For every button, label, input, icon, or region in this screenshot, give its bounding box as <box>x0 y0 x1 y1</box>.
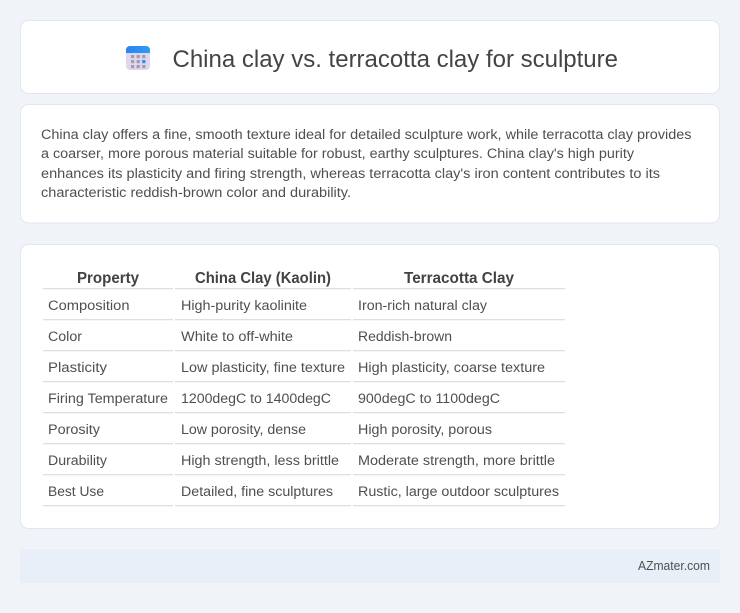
row: plasticity <box>48 360 545 376</box>
row: best use: Detailed, fine sculptures <box>181 484 333 500</box>
icon: calendar <box>126 46 150 70</box>
row: durability: Moderate strength, more brittle <box>358 453 555 469</box>
row: plasticity: Low plasticity, fine texture <box>181 360 345 376</box>
row: firing temperature: Firing Temperature <box>48 391 168 407</box>
row: porosity: Porosity <box>48 422 101 438</box>
row: best use <box>48 484 559 500</box>
row: durability: Durability <box>48 453 108 469</box>
summary text <box>41 127 692 201</box>
panel: summary <box>20 104 720 223</box>
table row lines <box>43 288 565 506</box>
panel: comparison table <box>20 244 720 528</box>
summary text: characteristic reddish-brown color and durability. <box>41 185 351 201</box>
footer credit: AZmater.com <box>638 559 710 573</box>
row: porosity: Low porosity, dense <box>181 422 306 438</box>
row: color <box>48 329 452 345</box>
title: China clay vs. terracotta clay for sculpture <box>172 46 618 73</box>
footer bar <box>20 549 720 583</box>
row: porosity: High porosity, porous <box>358 422 492 438</box>
row: firing temperature: 900degC to 1100degC <box>358 391 500 407</box>
row: color: Color <box>48 329 82 345</box>
row: plasticity: Plasticity <box>48 360 108 376</box>
row: best use: Best Use <box>48 484 104 500</box>
row: composition <box>48 298 488 314</box>
table header: China Clay (Kaolin) <box>195 270 331 287</box>
row: composition: Iron-rich natural clay <box>358 298 488 314</box>
row: color: Reddish-brown <box>358 329 452 345</box>
row: composition: Composition <box>48 298 130 314</box>
summary text: enhances its plasticity and firing strength, whereas terracotta clay's iron content contributes to its <box>41 166 660 182</box>
row: color: White to off-white <box>181 329 293 345</box>
summary text: a coarser, more porous material suitable for robust, earthy sculptures. China clay's high purity <box>41 146 635 162</box>
summary text: China clay offers a fine, smooth texture ideal for detailed sculpture work, while terracotta clay provides <box>41 127 692 143</box>
table header: Property <box>77 270 139 287</box>
row: firing temperature: 1200degC to 1400degC <box>181 391 331 407</box>
table header <box>77 270 514 287</box>
row: porosity <box>48 422 492 438</box>
row: composition: High-purity kaolinite <box>181 298 307 314</box>
panel: title card <box>20 20 720 94</box>
table header: Terracotta Clay <box>404 270 514 287</box>
row: firing temperature <box>48 391 500 407</box>
row: durability: High strength, less brittle <box>181 453 339 469</box>
row: durability <box>48 453 555 469</box>
row: best use: Rustic, large outdoor sculptures <box>358 484 559 500</box>
row: plasticity: High plasticity, coarse texture <box>358 360 545 376</box>
